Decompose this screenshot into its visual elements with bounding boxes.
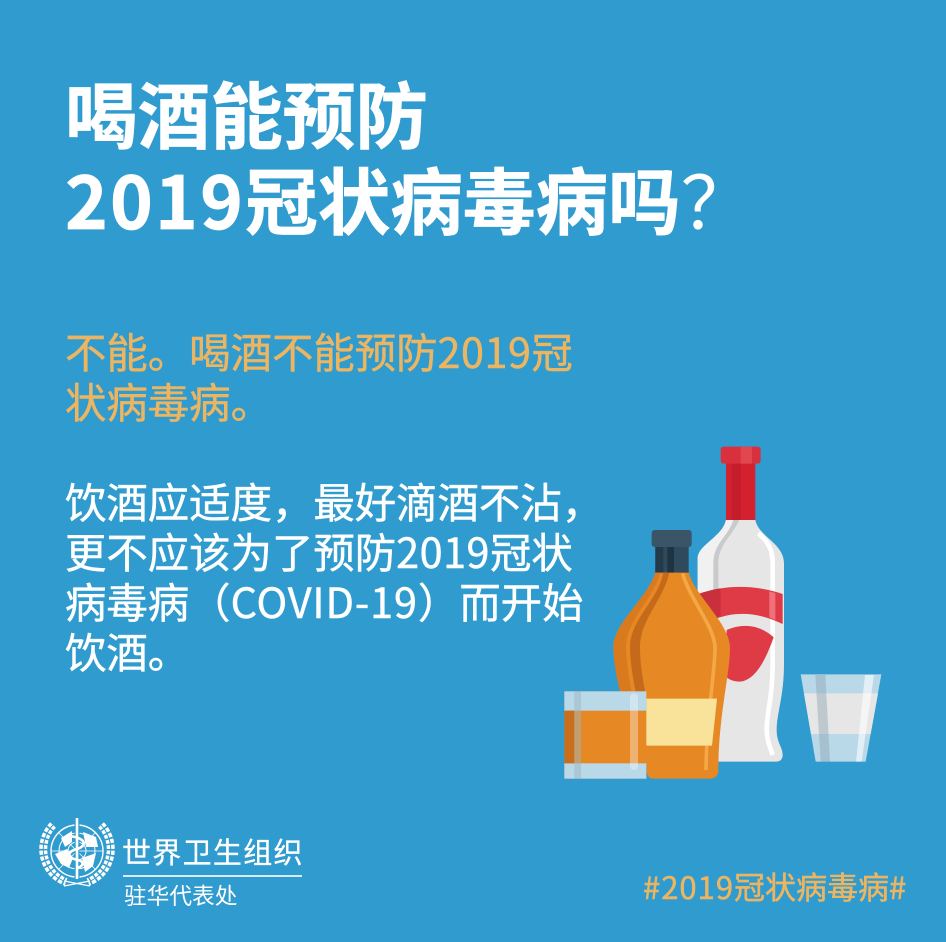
answer text	[65, 320, 573, 430]
answer text: 不能。喝酒不能预防2019冠	[65, 320, 573, 380]
advice text: 饮酒。	[65, 620, 189, 680]
advice text	[65, 470, 603, 680]
hashtag: #2019冠状病毒病#	[643, 862, 906, 908]
answer text: 状病毒病。	[65, 370, 272, 430]
advice text: 病毒病（COVID-19）而开始	[65, 570, 583, 630]
glass of white liquor	[801, 674, 881, 762]
logo text: 世界卫生组织	[122, 830, 304, 872]
illustration: bottles and glasses	[564, 446, 882, 779]
advice text: 更不应该为了预防2019冠状	[65, 520, 573, 580]
title: 2019冠状病毒病吗？	[65, 145, 753, 250]
logo text	[122, 830, 304, 911]
icon: WHO emblem	[39, 818, 115, 887]
title	[65, 59, 753, 250]
title: 喝酒能预防	[65, 59, 428, 164]
short glass of whisky	[564, 691, 646, 779]
advice text: 饮酒应适度，最好滴酒不沾，	[65, 470, 603, 530]
orange bottle with dark neck	[613, 530, 730, 779]
logo text: 驻华代表处	[124, 878, 237, 911]
white bottle with red neck	[698, 447, 784, 762]
